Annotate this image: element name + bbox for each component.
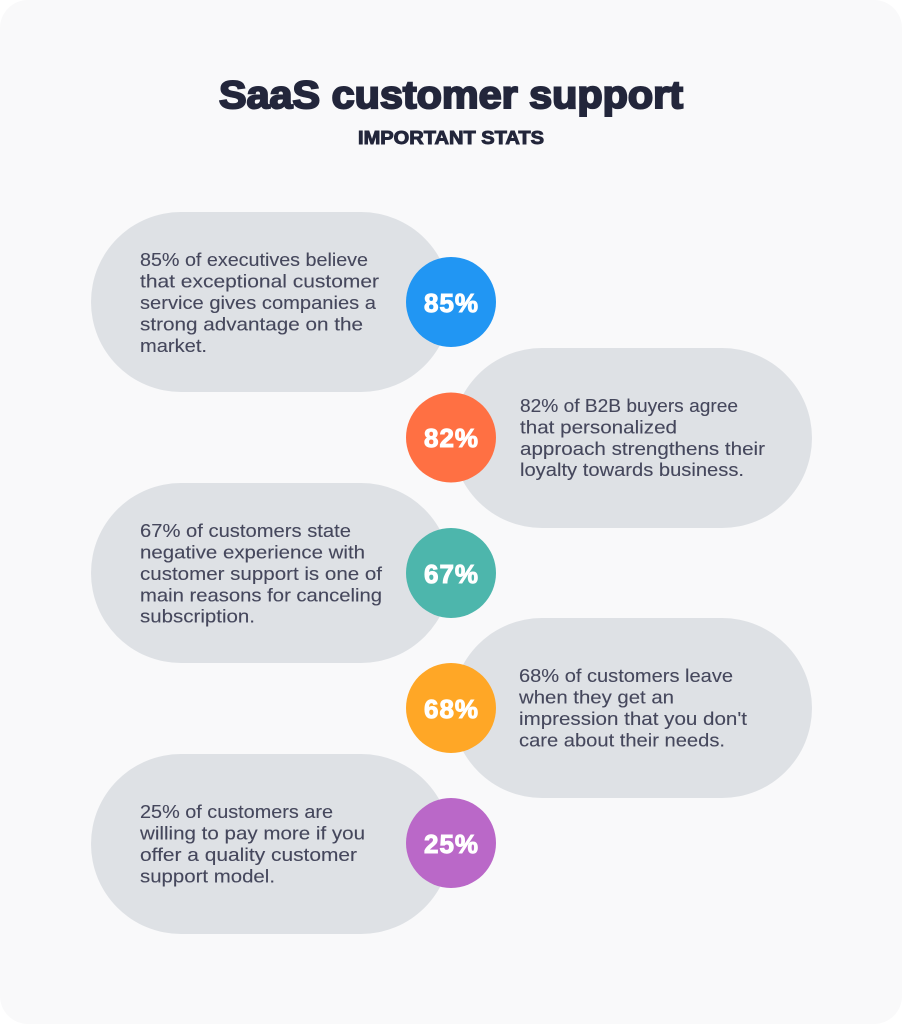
panel: 82% stat bbox=[452, 348, 812, 528]
text block: 85% description: market. bbox=[140, 336, 207, 356]
text block: 68% description: impression that you don't bbox=[519, 709, 747, 729]
bubble: 67% bbox=[91, 483, 451, 663]
badge: 82%: 82% bbox=[424, 423, 478, 453]
text block: 68% description: 68% of customers leave bbox=[519, 666, 733, 686]
badge: 25%: 25% bbox=[424, 829, 478, 859]
bubble: 82% bbox=[452, 348, 812, 528]
badge: 82% bbox=[406, 392, 496, 482]
text block: 67% description: 67% of customers state bbox=[140, 521, 351, 541]
badge: 25% bbox=[406, 798, 496, 888]
text block: 82% description: 82% of B2B buyers agree bbox=[520, 396, 738, 416]
text block: 82% description: that personalized bbox=[520, 418, 677, 438]
badge: 85%: 85% bbox=[424, 288, 478, 318]
panel: 25% stat bbox=[91, 754, 451, 934]
text block: 68% description bbox=[518, 666, 747, 750]
text block: 85% description bbox=[140, 250, 379, 356]
badge: 68%: 68% bbox=[424, 694, 478, 724]
text block: 25% description: support model. bbox=[140, 866, 275, 886]
subtitle: IMPORTANT STATS bbox=[358, 128, 544, 148]
text block: 25% description: willing to pay more if you bbox=[139, 824, 365, 844]
bubble: 25% bbox=[91, 754, 451, 934]
text block: 25% description: offer a quality customer bbox=[140, 845, 357, 865]
text block: 85% description: service gives companies a bbox=[140, 293, 377, 313]
panel: 67% stat bbox=[91, 483, 451, 663]
text block: 25% description: 25% of customers are bbox=[140, 802, 333, 822]
text block: 67% description bbox=[140, 521, 383, 626]
text block: 67% description: customer support is one of bbox=[140, 564, 383, 584]
text block: 68% description: care about their needs. bbox=[519, 730, 725, 750]
text block: 82% description: approach strengthens their bbox=[520, 439, 765, 459]
badge: 67%: 67% bbox=[424, 559, 478, 589]
panel: 68% stat bbox=[452, 618, 812, 798]
text block: 82% description: loyalty towards business. bbox=[520, 460, 744, 480]
text block: 85% description: 85% of executives believe bbox=[140, 250, 368, 270]
text block: 68% description: when they get an bbox=[518, 688, 674, 708]
badge: 67% bbox=[406, 528, 496, 618]
panel: 85% stat bbox=[91, 212, 451, 392]
bubble: 68% bbox=[452, 618, 812, 798]
text block: 82% description bbox=[520, 396, 765, 480]
title: SaaS customer support bbox=[219, 74, 683, 117]
text block: 85% description: strong advantage on the bbox=[140, 314, 363, 334]
text block: 67% description: subscription. bbox=[140, 606, 255, 626]
text block: 85% description: that exceptional customer bbox=[140, 272, 379, 292]
text block: 25% description bbox=[139, 802, 365, 886]
badge: 68% bbox=[406, 663, 496, 753]
text block: 67% description: negative experience with bbox=[140, 542, 365, 562]
badge: 85% bbox=[406, 257, 496, 347]
bubble: 85% bbox=[91, 212, 451, 392]
text block: 67% description: main reasons for canceling bbox=[140, 586, 382, 606]
